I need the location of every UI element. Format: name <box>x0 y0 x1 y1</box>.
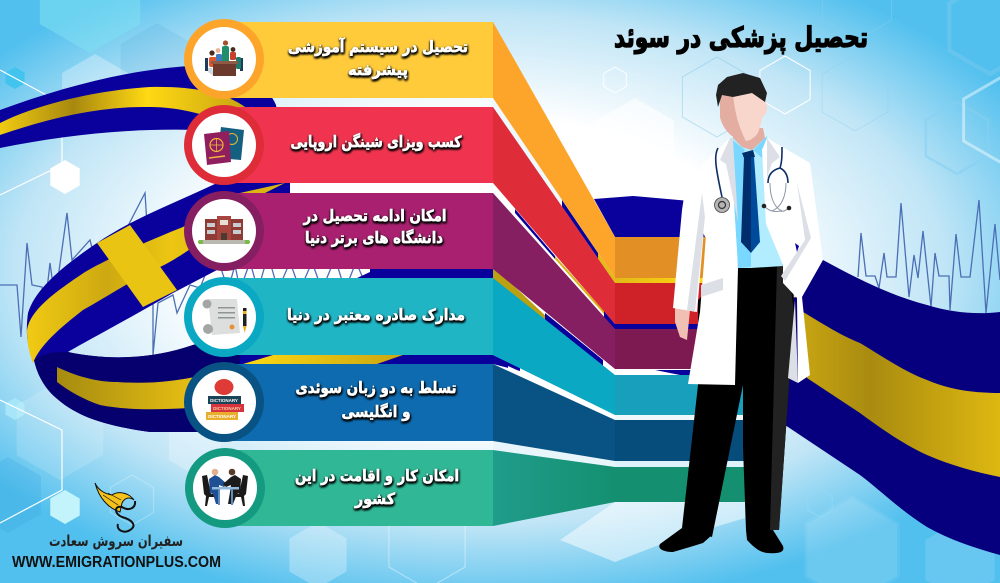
text: تحصیل در سیستم آموزشی <box>288 37 468 56</box>
ECG line left <box>0 193 368 355</box>
icon: scroll and pen <box>202 299 246 335</box>
text: مدارک صادره معتبر در دنیا <box>287 306 465 324</box>
text: پیشرفته <box>348 61 408 80</box>
panel: valid certificates <box>184 277 493 357</box>
ribbon lower band <box>27 170 493 432</box>
text <box>295 467 459 508</box>
ring <box>184 277 264 357</box>
ring <box>184 105 264 185</box>
doctor illustration <box>659 73 823 553</box>
ribbon upper band <box>0 66 290 193</box>
icon: apple and dictionaries <box>206 379 244 420</box>
text: دانشگاه های برتر دنیا <box>305 228 443 247</box>
ribbon gap stripe <box>243 355 403 364</box>
logo text: سفیران سروش سعادت <box>49 532 183 550</box>
ECG line right <box>858 200 1000 313</box>
doctor coat <box>673 138 823 385</box>
side panels and gaps <box>493 22 615 526</box>
doctor tie <box>741 150 760 253</box>
panel: two languages <box>184 362 493 442</box>
doctor neck and head <box>716 73 767 150</box>
side panel yellow <box>493 22 615 278</box>
doctor shirt <box>730 136 783 268</box>
side panel green <box>493 450 615 526</box>
ribbon upper stripe <box>0 87 245 135</box>
side panel red <box>493 107 615 324</box>
logo mark <box>95 483 135 532</box>
text <box>288 37 468 80</box>
text: تسلط به دو زبان سوئدی <box>296 379 456 397</box>
stethoscope <box>714 147 791 212</box>
flat bands behind doctor <box>615 237 745 502</box>
blue ribbon behind side panels <box>594 196 705 285</box>
Swedish flag ribbon left <box>0 66 493 432</box>
side panel purple <box>493 193 615 369</box>
text: و انگلیسی <box>342 402 410 421</box>
text: کسب ویزای شینگن اروپایی <box>290 132 462 152</box>
text: کشور <box>354 490 396 508</box>
panel: work and residence <box>185 448 493 528</box>
icon: passports <box>204 127 244 165</box>
panel: top universities <box>184 191 493 271</box>
flag cross <box>97 225 177 307</box>
ring <box>184 362 264 442</box>
text: امکان ادامه تحصیل در <box>303 207 446 225</box>
icon: apple and dictionaries: DICTIONARY <box>213 406 241 411</box>
text <box>303 207 446 247</box>
logo <box>12 483 221 571</box>
ring <box>184 19 264 99</box>
Swedish flag ribbon right <box>785 260 1000 555</box>
title: تحصیل پزشکی در سوئد <box>614 21 868 54</box>
side panel teal <box>493 278 615 415</box>
panel: advanced education <box>184 19 493 99</box>
icon: apple and dictionaries: DICTIONARY <box>208 414 236 419</box>
panel: schengen visa <box>184 105 493 185</box>
ring <box>185 448 265 528</box>
ribbon back stripe <box>57 367 195 409</box>
icon: apple and dictionaries: DICTIONARY <box>210 398 238 403</box>
ring <box>184 191 264 271</box>
icon: business meeting <box>202 469 248 506</box>
text <box>296 379 456 421</box>
gap strips <box>493 98 562 207</box>
icon: team meeting <box>205 40 243 76</box>
text: امکان کار و اقامت در این <box>295 467 459 485</box>
website: WWW.EMIGRATIONPLUS.COM <box>12 554 221 571</box>
side panel blue <box>493 364 615 461</box>
doctor hands <box>675 308 690 340</box>
doctor trousers <box>659 262 794 553</box>
ribbon front stripe <box>27 183 285 363</box>
icon: university building <box>198 216 250 244</box>
